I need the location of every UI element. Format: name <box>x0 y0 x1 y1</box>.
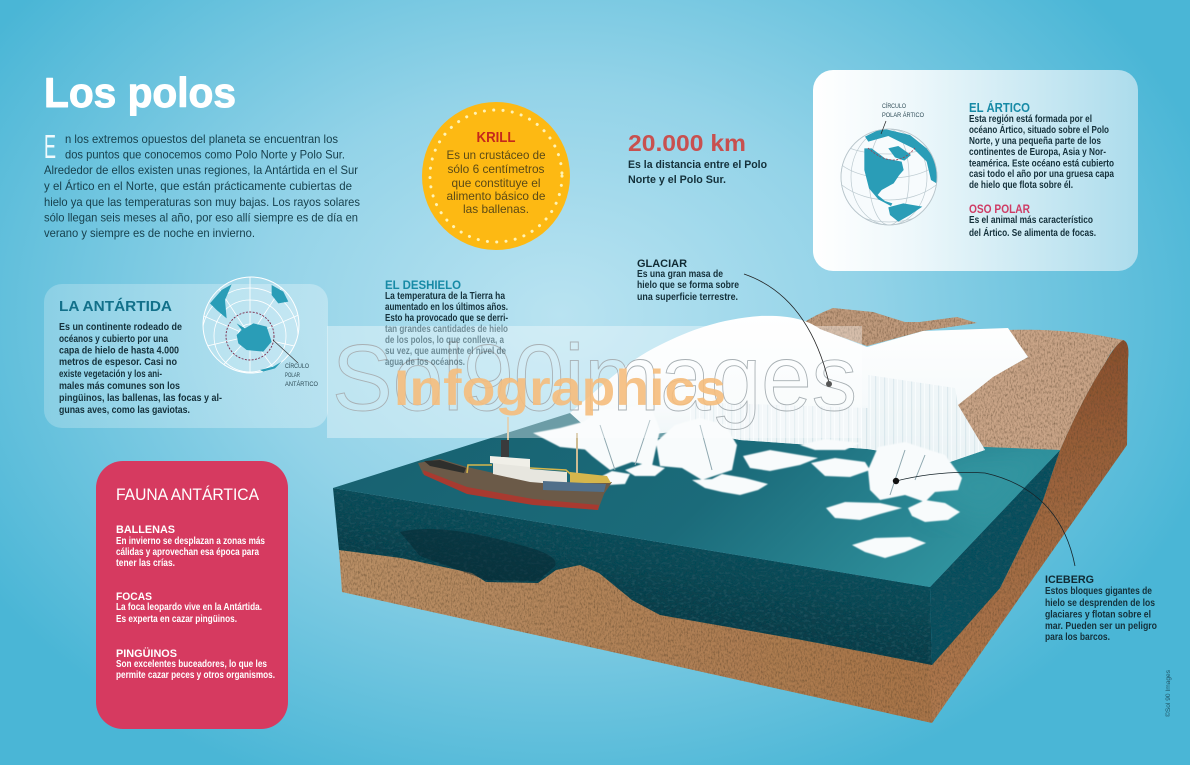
text: Oso polar: del Ártico. Se alimenta de focas. <box>969 226 1096 239</box>
water front face <box>333 488 932 665</box>
distance fact: Norte y el Polo Sur. <box>628 174 726 186</box>
text: La Antártida: gunas aves, como las gaviotas. <box>59 405 190 416</box>
globe: Antarctica <box>202 276 300 374</box>
panel: El Ártico <box>811 70 1138 271</box>
Focas: La foca leopardo vive en la Antártida. <box>116 602 262 613</box>
Focas <box>116 591 262 625</box>
text: El Ártico: océano Ártico, situado sobre el Polo <box>969 123 1109 136</box>
distance fact: Es la distancia entre el Polo <box>628 159 767 171</box>
heading: La Antártida: LA ANTÁRTIDA <box>59 298 172 315</box>
watermark: Infographics: Infographics <box>394 360 726 416</box>
krill badge: las ballenas. <box>463 203 529 216</box>
panel background <box>96 461 288 729</box>
mountain <box>803 308 977 346</box>
callout: El deshielo: de los polos, lo que conlleva, a <box>385 335 504 346</box>
callout: El deshielo <box>385 278 508 368</box>
floe <box>826 502 902 520</box>
intro text: hielo ya que las temperaturas son muy bajas. Los rayos solares <box>44 195 360 209</box>
floe <box>625 463 665 476</box>
callout: El deshielo: Esto ha provocado que se derri- <box>385 313 508 324</box>
sea floor shadow <box>400 529 556 581</box>
glacier cliff front <box>690 402 868 449</box>
ship hull <box>418 459 612 510</box>
iceberg dot <box>893 478 899 484</box>
intro text: Alrededor de ellos existen unas regiones, la Antártida en el Sur <box>44 163 358 177</box>
text: El Ártico: casi todo el año por una gruesa capa <box>969 169 1114 180</box>
text: El Ártico: Esta región está formada por el <box>969 114 1092 125</box>
panel background <box>44 284 328 428</box>
floe <box>811 458 870 477</box>
intro text: verano y siempre es de noche en invierno. <box>44 226 255 240</box>
drop cap: E <box>44 128 56 165</box>
callout: Glaciar: GLACIAR <box>637 258 687 270</box>
watermark band <box>327 326 862 438</box>
Pingüinos: permite cazar peces y otros organismos. <box>116 670 275 681</box>
callout: Iceberg: hielo se desprenden de los <box>1045 598 1155 609</box>
label: Círculo polar antártico: CÍRCULO <box>285 361 309 370</box>
callout: El deshielo: aumentado en los últimos años. <box>385 302 508 313</box>
ship <box>418 417 612 510</box>
text: Oso polar: Es el animal más característico <box>969 215 1093 226</box>
3D sea block diagram <box>333 308 1128 723</box>
superstructure <box>493 463 567 485</box>
floe <box>800 439 860 450</box>
panel: Fauna antártica <box>96 461 288 729</box>
text: Oso polar <box>969 215 1096 239</box>
krill heading: KRILL <box>476 129 516 146</box>
sediment front face <box>339 550 932 723</box>
callout: El deshielo: La temperatura de la Tierra ha <box>385 291 505 302</box>
Focas: Es experta en cazar pingüinos. <box>116 614 237 625</box>
label: Círculo polar ártico: POLAR ÁRTICO <box>882 110 924 119</box>
floe <box>692 474 768 495</box>
krill circle <box>422 102 570 250</box>
ice behind ship <box>533 420 630 455</box>
text: La Antártida: metros de espesor. Casi no <box>59 357 177 368</box>
text: La Antártida: males más comunes son los <box>59 381 180 392</box>
heading: Oso polar: OSO POLAR <box>969 202 1030 216</box>
callout: Glaciar: una superficie terrestre. <box>637 292 738 303</box>
text: El Ártico: teamérica. Este océano está cubierto <box>969 158 1114 170</box>
intro text <box>44 128 360 240</box>
stern deck <box>424 460 466 473</box>
watermark: Sol90images: Sol90images <box>332 325 857 430</box>
hull red band <box>423 470 599 510</box>
distance fact <box>628 130 767 186</box>
ship tower <box>501 440 509 457</box>
panel: La Antártida <box>44 270 328 428</box>
floe <box>743 450 818 471</box>
Ballenas: BALLENAS <box>116 524 175 536</box>
rear iceberg two <box>656 418 737 480</box>
krill badge: que constituye el <box>452 177 540 190</box>
callout: Iceberg: mar. Pueden ser un peligro <box>1045 621 1157 632</box>
water surface <box>333 413 1060 587</box>
text: El Ártico: continentes de Europa, Asia y Nor- <box>969 147 1106 158</box>
panel heading: FAUNA ANTÁRTICA <box>116 485 259 504</box>
bridge <box>490 456 530 467</box>
krill badge <box>422 102 570 250</box>
glacier leader line <box>744 274 829 383</box>
dotted ring <box>430 110 562 242</box>
label: Círculo polar antártico: ANTÁRTICO <box>285 379 318 388</box>
iceberg cluster <box>533 405 962 558</box>
krill badge: alimento básico de <box>446 190 546 203</box>
land surface <box>955 330 1123 450</box>
intro text: y el Ártico en el Norte, que están prácticamente cubiertas de <box>44 178 352 193</box>
panel background <box>813 70 1138 271</box>
text: La Antártida: existe vegetación y los ani- <box>59 369 162 380</box>
distance number: 20.000 km <box>628 130 746 156</box>
surface light patch <box>942 447 1042 504</box>
masts <box>508 417 577 473</box>
label: Círculo polar ártico <box>882 101 924 119</box>
callout: El deshielo: tan grandes cantidades de hielo <box>385 324 508 335</box>
intro text: n los extremos opuestos del planeta se encuentran los <box>65 132 338 146</box>
intro text: dos puntos que conocemos como Polo Norte y Polo Sur. <box>65 148 345 162</box>
text: El Ártico <box>969 114 1114 191</box>
big iceberg <box>868 442 962 502</box>
Pingüinos: Son excelentes buceadores, lo que les <box>116 659 267 670</box>
glacier dot <box>826 381 832 387</box>
text: El Ártico: de hielo que flota sobre él. <box>969 180 1073 191</box>
glacier cliff right <box>868 375 985 462</box>
floe <box>908 500 960 522</box>
globe: Arctic <box>840 120 938 226</box>
Ballenas: cálidas y aprovechan esa época para <box>116 547 259 558</box>
Focas: FOCAS <box>116 591 152 603</box>
yellow rail <box>467 465 575 478</box>
text: El Ártico: Norte, y una pequeña parte de los <box>969 136 1101 147</box>
callout: Iceberg: glaciares y flotan sobre el <box>1045 610 1151 620</box>
callout: Iceberg: Estos bloques gigantes de <box>1045 586 1152 597</box>
glacier <box>570 308 1028 462</box>
callout: Iceberg: ICEBERG <box>1045 574 1094 586</box>
callout: El deshielo: su vez, que aumente el nivel de <box>385 346 506 357</box>
Ballenas: tener las crías. <box>116 558 175 569</box>
Pingüinos: PINGÜINOS <box>116 647 177 660</box>
intro text: sólo llegan seis meses al año, por eso allí siempre es de día en <box>44 210 358 224</box>
Pingüinos <box>116 647 275 681</box>
title: Los polos <box>44 69 236 116</box>
Ballenas: En invierno se desplazan a zonas más <box>116 536 265 547</box>
krill badge: sólo 6 centímetros <box>448 163 545 176</box>
rear iceberg one <box>575 405 660 470</box>
text: La Antártida: océanos y cubierto por una <box>59 334 168 345</box>
iceberg leader line <box>896 472 1075 566</box>
callout: Iceberg: para los barcos. <box>1045 632 1110 643</box>
krill badge: Es un crustáceo de <box>446 149 546 162</box>
text: La Antártida <box>59 322 222 416</box>
credit: ©Sol 90 Images <box>1164 669 1172 717</box>
text: La Antártida: pingüinos, las ballenas, las focas y al- <box>59 393 222 404</box>
yellow deck <box>570 472 611 483</box>
callout: Glaciar: hielo que se forma sobre <box>637 280 739 291</box>
sediment right face <box>929 340 1128 723</box>
heading: El Ártico: EL ÁRTICO <box>969 100 1030 115</box>
callout: Iceberg <box>893 472 1157 643</box>
iceberg cracks <box>600 420 925 495</box>
callout: Glaciar <box>637 258 832 387</box>
ice sheet <box>570 316 1028 462</box>
floe <box>600 471 630 485</box>
callout: El deshielo: agua de los océanos. <box>385 357 465 368</box>
text: La Antártida: Es un continente rodeado de <box>59 322 182 333</box>
water right face <box>930 450 1060 665</box>
callout: Glaciar: Es una gran masa de <box>637 269 723 280</box>
label: Círculo polar ártico: CÍRCULO <box>882 101 906 110</box>
blue stripe <box>543 481 606 492</box>
callout: El deshielo: EL DESHIELO <box>385 278 461 292</box>
label: Círculo polar antártico <box>285 361 318 388</box>
label: Círculo polar antártico: POLAR <box>285 372 300 379</box>
Ballenas <box>116 524 265 569</box>
text: La Antártida: capa de hielo de hasta 4.000 <box>59 346 179 356</box>
floe <box>852 537 926 558</box>
